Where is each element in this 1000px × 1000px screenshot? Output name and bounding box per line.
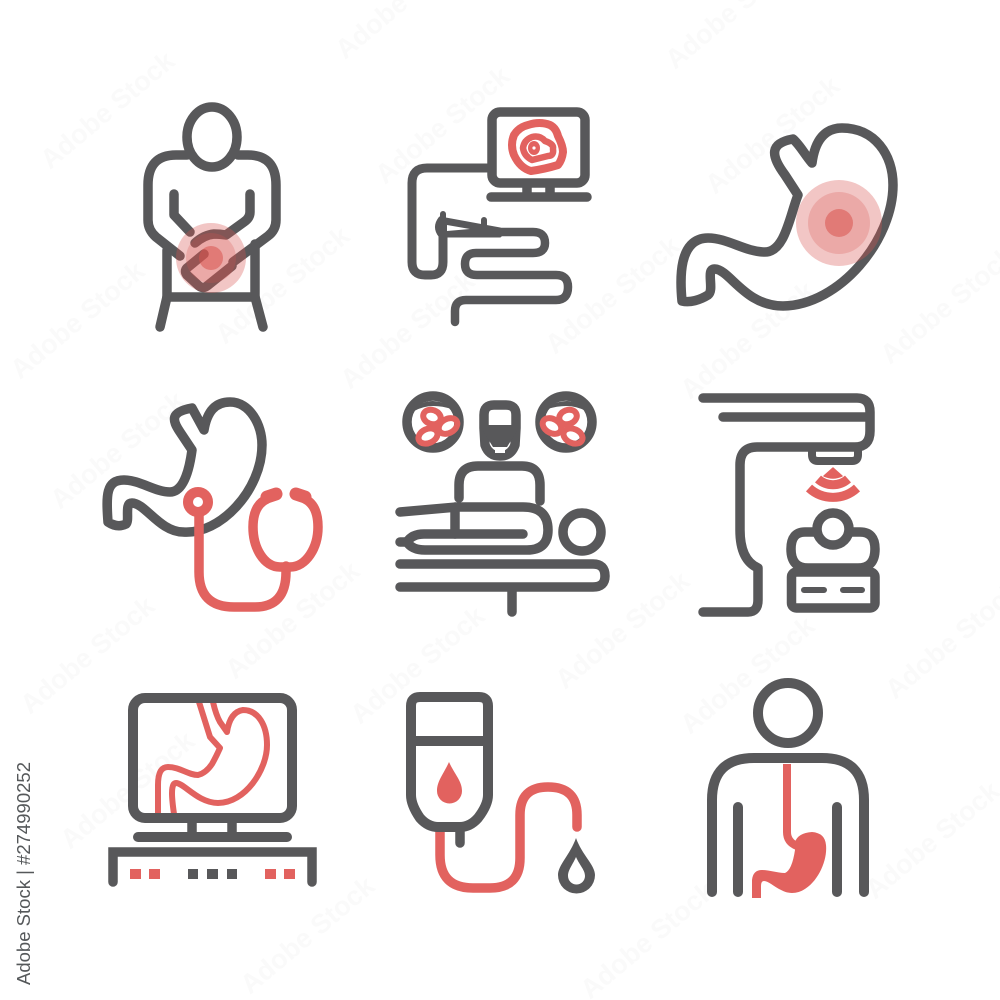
watermark pattern: Adobe Stock [15, 590, 161, 720]
watermark pattern: Adobe Stock [235, 870, 381, 1000]
scanner lens [812, 449, 858, 461]
pain circles [796, 180, 882, 266]
signal waves [809, 468, 857, 497]
watermark pattern: Adobe Stock [35, 45, 181, 175]
watermark pattern: Adobe Stock [55, 725, 201, 855]
watermark pattern: Adobe Stock [675, 610, 821, 740]
icon: person holding painful stomach [148, 107, 276, 327]
water drop [558, 838, 595, 894]
watermark pattern: Adobe Stock [220, 555, 366, 685]
surgeon head [483, 405, 517, 456]
patient head [563, 513, 601, 551]
surgeon shoulders [459, 466, 540, 501]
pain circles [176, 223, 246, 293]
table box [792, 572, 875, 608]
watermark pattern: Adobe Stock [540, 230, 686, 360]
watermark pattern: Adobe Stock [210, 220, 356, 350]
stomach on screen [158, 702, 267, 814]
patient on scanner [791, 532, 875, 568]
watermark pattern: Adobe Stock [5, 255, 151, 385]
watermark pattern: Adobe Stock [370, 60, 516, 190]
icon: surgeon and patient [400, 396, 605, 612]
blood drop [437, 762, 462, 804]
watermark pattern: Adobe Stock [45, 385, 191, 515]
patient body [400, 507, 548, 550]
monitor [492, 112, 585, 183]
left surgical lamp [407, 396, 460, 448]
stock credit vertical text: Adobe Stock | #274990252 [14, 762, 34, 985]
icon: stomach with pain point [681, 128, 893, 306]
icon: x-ray machine over patient [703, 398, 875, 612]
right surgical lamp [540, 396, 592, 448]
lesion on screen [512, 123, 563, 171]
watermark pattern: Adobe Stock [335, 265, 481, 395]
icon: stomach with stethoscope [107, 402, 318, 607]
stomach anatomy [752, 764, 826, 898]
indicator lights [130, 869, 295, 879]
IV tube [440, 787, 577, 888]
watermark pattern: Adobe Stock [345, 600, 491, 730]
scope handle [436, 218, 502, 236]
watermark pattern: Adobe Stock [550, 565, 696, 695]
stethoscope [188, 492, 318, 607]
icon: monitor showing stomach [113, 698, 312, 882]
icon: person with stomach anatomy [712, 683, 864, 898]
icon: IV drip bag [411, 697, 595, 894]
icon: endoscope with monitor [412, 112, 587, 322]
watermark pattern: Adobe Stock [700, 70, 846, 200]
watermark pattern: Adobe Stock [675, 275, 821, 405]
operating table [400, 564, 605, 612]
